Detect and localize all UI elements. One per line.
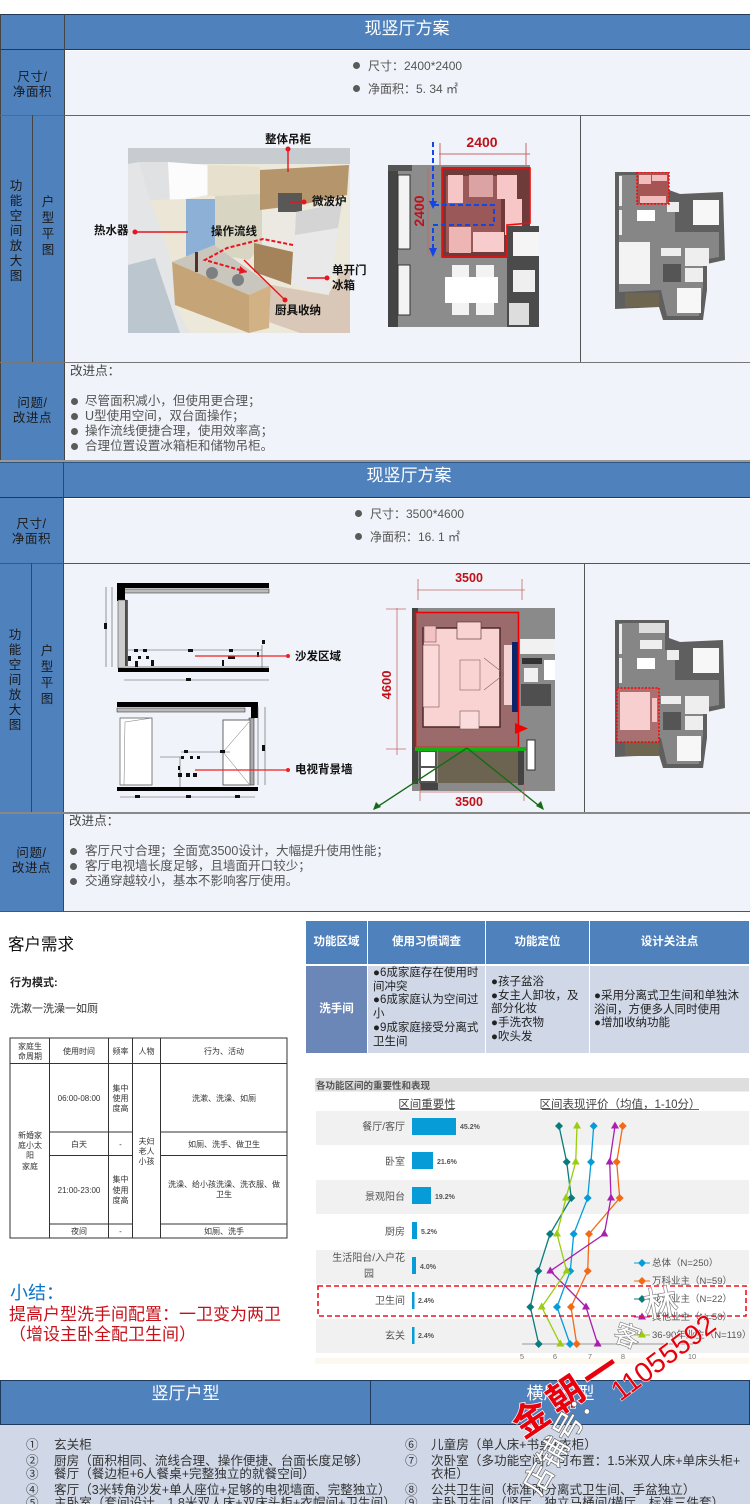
panel: second scheme table [0,462,750,912]
right list: ⑦ [405,1454,418,1468]
living room floor plan [373,571,555,810]
table body row [306,966,749,1053]
second issue label [12,846,51,875]
kitchen floor plan [388,134,539,327]
left list: ③ [26,1467,39,1481]
first size bullets: 净面积：5. 34 ㎡ [368,82,458,96]
usage schedule table: 频率 [112,1046,128,1056]
kitchen floor plan: 2400 [411,195,427,227]
table body row: ●孩子盆浴 [491,976,544,988]
importance bars: 45.2% [460,1124,481,1131]
living room floor plan: 3500 [455,795,483,809]
importance bars: 园 [364,1268,374,1280]
right list [405,1438,740,1504]
usage schedule table: 洗澡、给小孩洗澡、洗衣服、做 [168,1179,280,1189]
first header bar [1,14,750,50]
callout: sofa zone [195,649,341,663]
first size label: 尺寸/ [17,70,48,84]
line series: orange [567,1122,627,1348]
second issue label: 问题/ [16,846,47,860]
legend: 龙湖业主（N=22） [652,1293,732,1305]
second improvement points: 改进点： [69,814,119,828]
legend: 其他业主（N=50） [652,1311,732,1323]
left title: 竖厅户型 [152,1384,220,1403]
panel: first scheme table [0,14,750,462]
usage schedule table: 家庭 [22,1161,38,1171]
second size bullets: 净面积：16. 1 ㎡ [370,530,460,544]
second improvement points: 客厅尺寸合理；全面宽3500设计，大幅提升使用性能； [85,844,389,858]
first improvement points: U型使用空间，双台面操作； [85,409,245,423]
callout: tv wall: 电视背景墙 [295,762,353,776]
usage schedule table: 使用 [112,1185,128,1195]
second size label: 尺寸/ [16,517,47,531]
second size bullets: 尺寸：3500*4600 [370,507,464,521]
second size bullets [355,507,464,544]
right list: 次卧室（多功能空间，可布置：1.5米双人床+单床头柜+ [431,1454,740,1468]
panel: unit type comparison [0,1380,750,1504]
kitchen render with callouts: 微波炉 [312,194,346,208]
right list: 儿童房（单人床+书桌+衣柜） [431,1438,597,1452]
watermark: 客 [610,1317,645,1355]
importance bars: 景观阳台 [365,1190,405,1203]
usage schedule table: 白天 [71,1139,87,1149]
list background [0,1425,750,1504]
kitchen floor plan: 2400 [466,134,498,150]
usage schedule table: 家庭生 [18,1041,42,1051]
usage schedule table [10,1038,288,1238]
importance bars: 生活阳台/入户花 [332,1251,405,1264]
second title: 现竖厅方案 [366,466,452,485]
column headings: 区间重要性 [398,1097,456,1111]
kitchen render with callouts: 热水器 [94,223,129,237]
function zone table [306,921,749,1053]
first issue label: 改进点 [13,411,52,425]
usage schedule table: 如厕、洗手 [204,1226,244,1236]
left list: 餐厅（餐边柜+6人餐桌+完整独立的就餐空间） [54,1467,315,1481]
left list: ① [26,1438,39,1452]
left list [26,1438,396,1504]
living room elevation drawings [104,583,353,798]
table body row: 洗手间 [319,1003,354,1015]
callout lines [133,147,329,302]
usage schedule table: 小孩 [138,1156,154,1166]
usage schedule table: 人物 [138,1046,154,1056]
second issue label: 改进点 [12,861,51,875]
living room position thumbnail [615,620,725,768]
table body row: ●9成家庭接受分离式卫生间 [373,1022,478,1048]
usage schedule table: 21:00-23:00 [58,1186,101,1195]
table header row: 功能定位 [514,936,560,948]
importance bars: 厨房 [385,1225,405,1238]
usage schedule table: 卫生 [216,1189,232,1199]
right list: 公共卫生间（标准两分离式卫生间、手盆独立） [431,1483,695,1497]
summary text: 提高户型洗手间配置：一卫变为两卫 [9,1305,281,1324]
right list: ⑥ [405,1438,418,1452]
second size label [12,517,51,546]
right title: 横厅户型 [526,1384,594,1403]
importance bars: 卧室 [385,1155,405,1168]
chart title band: 各功能区间的重要性和表现 [316,1080,431,1092]
usage schedule table: 夫妇 [138,1136,154,1146]
watermark: 林 [641,1283,681,1326]
usage schedule table: 阳 [26,1151,34,1160]
first improvement points [70,364,273,453]
kitchen render with callouts: 操作流线 [211,224,257,238]
axis [520,1344,696,1361]
first improvement points: 合理位置设置冰箱柜和储物吊柜。 [85,439,273,453]
importance bars: 21.6% [437,1159,458,1166]
first title: 现竖厅方案 [364,19,450,38]
first size label [13,70,52,99]
summary text [9,1305,281,1344]
first improvement points: 改进点： [70,364,120,378]
first content background [65,51,750,461]
column headings: 区间表现评价（均值，1-10分） [539,1097,701,1111]
table body row: ●采用分离式卫生间和单独沐浴间，方便多人同时使用 [594,990,739,1016]
kitchen render with callouts [94,132,366,333]
left list: 厨房（面积相同、流线合理、操作便捷、台面长度足够） [54,1454,369,1468]
chart title band [315,1078,749,1092]
left list: 客厅（3米转角沙发+单人座位+足够的电视墙面、完整独立） [54,1483,391,1497]
table body row: ●手洗衣物 [491,1017,544,1029]
usage schedule table: 06:00-08:00 [58,1094,101,1103]
highlight box: bathroom row [318,1286,746,1316]
behaviour mode label: 行为模式: [10,977,58,989]
performance chart [315,1078,750,1364]
usage schedule table: 行为、活动 [204,1046,244,1056]
watermark [505,1283,721,1500]
second improvement points: 交通穿越较小，基本不影响客厅使用。 [85,874,298,888]
usage schedule table: 庭小太 [18,1140,42,1150]
usage schedule table: 度高 [112,1103,128,1113]
importance bars: 2.4% [418,1333,435,1340]
importance bars: 5.2% [421,1229,438,1236]
watermark: 店铺号： [517,1380,606,1500]
table header row: 设计关注点 [641,936,698,948]
usage schedule table: 夜间 [71,1226,87,1236]
legend [634,1257,750,1341]
usage schedule table: 使用 [112,1093,128,1103]
table body row: ●吹头发 [491,1031,532,1043]
elevation: tv wall [117,702,265,798]
first issue label: 问题/ [17,396,48,410]
first plan label: 户型平图 [42,195,54,257]
left list: 玄关柜 [54,1438,92,1452]
legend: 万科业主（N=59） [652,1275,732,1287]
importance bars: 4.0% [420,1264,437,1271]
kitchen render with callouts: 冰箱 [332,278,355,292]
table body row: ●女主人卸妆，及部分化妆 [491,990,578,1015]
second content background [64,499,750,911]
usage schedule table: 洗漱、洗澡、如厕 [192,1093,256,1103]
axis: 5 [520,1352,524,1361]
usage schedule table: 如厕、洗手、做卫生 [188,1139,260,1149]
usage schedule table: 集中 [112,1174,128,1184]
left list: ④ [26,1483,39,1497]
usage schedule table: - [119,1227,122,1236]
importance bars: 餐厅/客厅 [362,1120,405,1133]
right list: 衣柜） [431,1467,469,1481]
importance bars: 19.2% [435,1194,456,1201]
callout: tv wall [195,762,353,776]
column headings [398,1097,701,1111]
table body row: ●增加收纳功能 [594,1017,670,1029]
line series: purple [546,1122,619,1346]
legend: 36-90年业主（N=119） [652,1329,750,1341]
usage schedule table: - [119,1140,122,1149]
second improvement points [69,814,389,888]
line series: teal [526,1122,575,1348]
elevation: sofa wall [104,583,269,681]
second label column [0,498,63,911]
kitchen render with callouts: 单开门 [332,263,366,277]
second improvement points: 客厅电视墙长度足够，且墙面开口较少； [85,859,311,873]
kitchen render with callouts: 整体吊柜 [265,132,311,146]
line series: green [538,1122,581,1346]
table body row: ●6成家庭存在使用时间冲突 [373,967,478,993]
usage schedule table: 老人 [138,1146,154,1156]
first function label: 功能空间放大图 [10,179,22,283]
usage schedule table: 新婚家 [18,1130,42,1140]
table header row: 功能区域 [314,936,360,948]
importance bars [332,1118,481,1344]
right header [371,1380,750,1425]
first label column [1,50,64,461]
living room floor plan: 4600 [379,671,394,699]
table header row: 使用习惯调查 [392,936,461,948]
watermark: 金朝一 [505,1341,632,1446]
table body row: ●6成家庭认为空间过小 [373,994,478,1020]
axis: 6 [553,1352,557,1361]
second plan label: 户型平图 [41,644,53,706]
callout: sofa zone: 沙发区域 [295,649,341,663]
axis: 8 [621,1352,625,1361]
first improvement points: 尽管面积减小，但使用更合理； [85,394,261,408]
kitchen render with callouts: 厨具收纳 [275,303,321,317]
legend: 总体（N=250） [652,1257,718,1269]
usage schedule table: 集中 [112,1083,128,1093]
usage schedule table: 度高 [112,1195,128,1205]
usage schedule table: 命周期 [18,1051,42,1061]
watermark: 11055592 [605,1308,721,1407]
first issue label [13,396,52,425]
axis: 7 [588,1352,592,1361]
table header row [306,921,749,964]
heading: customer needs: 客户需求 [8,936,74,954]
first improvement points: 操作流线便捷合理，使用效率高； [85,424,273,438]
importance bars: 卫生间 [375,1294,405,1307]
left header [0,1380,371,1425]
first size bullets: 尺寸：2400*2400 [368,59,462,73]
line series: total [553,1122,598,1348]
kitchen position thumbnail [615,172,725,320]
living room floor plan: 3500 [455,571,483,585]
first size label: 净面积 [13,85,52,99]
first size bullets [353,59,462,96]
right list: ⑧ [405,1483,418,1497]
importance bars: 玄关 [385,1329,405,1342]
second size label: 净面积 [12,532,51,546]
summary heading: 小结： [10,1283,64,1303]
behaviour sequence: 洗漱一洗澡一如厕 [10,1003,98,1015]
second header bar [0,462,750,498]
summary text: （增设主卧全配卫生间） [9,1325,196,1344]
importance bars: 2.4% [418,1298,435,1305]
usage schedule table: 使用时间 [63,1046,95,1056]
second function label: 功能空间放大图 [9,628,21,732]
left list: ② [26,1454,39,1468]
axis: 10 [688,1352,696,1361]
